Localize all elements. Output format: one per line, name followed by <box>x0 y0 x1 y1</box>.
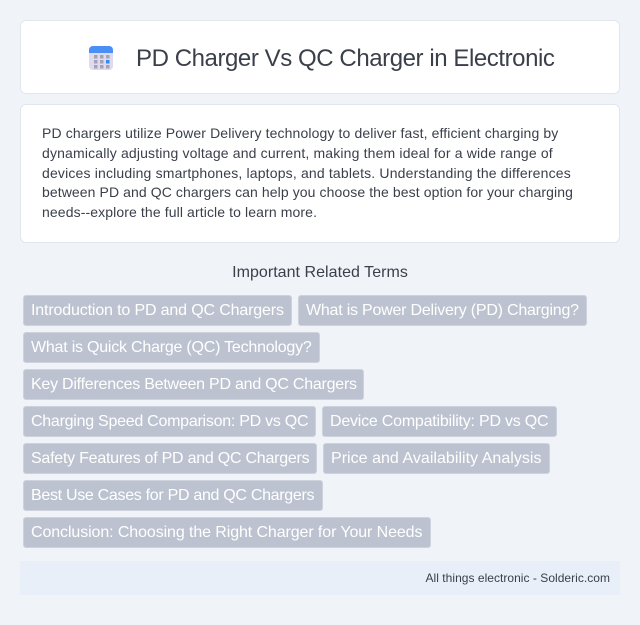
tag <box>23 480 323 511</box>
footer bar <box>20 561 620 595</box>
tag: Safety Features of PD and QC Chargers <box>31 450 309 467</box>
tag <box>322 406 557 437</box>
title panel <box>20 20 620 94</box>
intro paragraph: needs--explore the full article to learn more. <box>42 204 317 220</box>
intro paragraph: devices including smartphones, laptops, and tablets. Understanding the differences <box>42 165 571 181</box>
tag <box>323 443 550 474</box>
tag: Device Compatibility: PD vs QC <box>330 413 548 430</box>
title: PD Charger Vs QC Charger in Electronic <box>136 45 554 72</box>
tag <box>23 369 364 400</box>
related terms heading: Important Related Terms <box>232 264 408 281</box>
tag: Introduction to PD and QC Chargers <box>31 302 284 319</box>
intro paragraph: between PD and QC chargers can help you choose the best option for your charging <box>42 184 573 200</box>
intro paragraph: dynamically adjusting voltage and current, making them ideal for a wide range of <box>42 145 553 161</box>
tag <box>23 406 316 437</box>
tag <box>23 517 431 548</box>
tag <box>23 443 317 474</box>
intro text panel <box>20 104 620 243</box>
tag: Conclusion: Choosing the Right Charger for Your Needs <box>31 524 422 541</box>
tag: What is Quick Charge (QC) Technology? <box>31 339 312 356</box>
intro paragraph: PD chargers utilize Power Delivery technology to deliver fast, efficient charging by <box>42 125 558 141</box>
intro paragraph <box>42 125 573 220</box>
related terms tags <box>23 295 587 548</box>
tag <box>298 295 587 326</box>
tag: Charging Speed Comparison: PD vs QC <box>31 413 308 430</box>
tag <box>23 332 320 363</box>
tag <box>23 295 292 326</box>
tag: Price and Availability Analysis <box>331 450 542 467</box>
tag: What is Power Delivery (PD) Charging? <box>306 302 579 319</box>
footer credit: All things electronic - Solderic.com <box>426 571 610 585</box>
tag: Best Use Cases for PD and QC Chargers <box>31 487 314 504</box>
icon: calendar grid <box>89 46 113 70</box>
tag: Key Differences Between PD and QC Chargers <box>31 376 357 393</box>
